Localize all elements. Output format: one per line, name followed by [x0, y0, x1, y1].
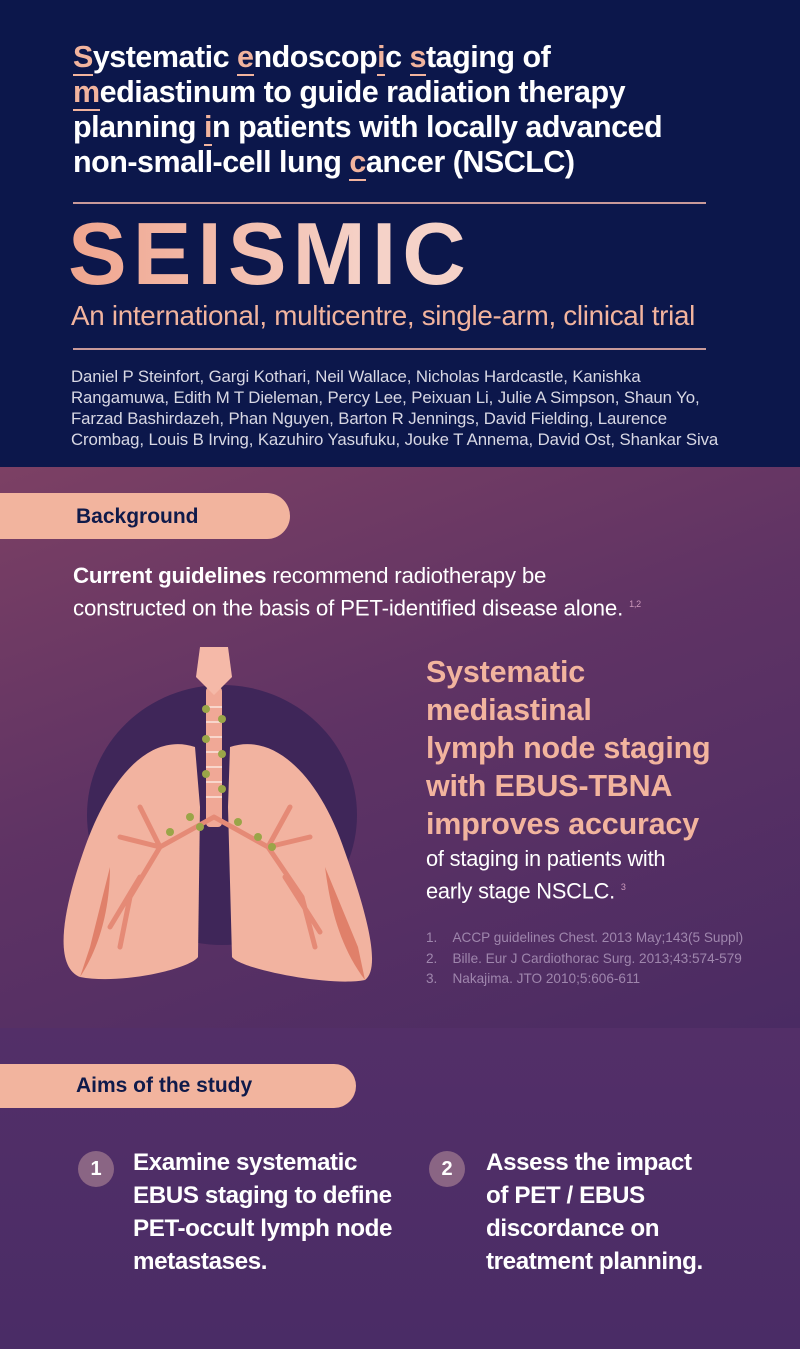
- aim 1: metastases.: [133, 1248, 267, 1275]
- title: [73, 40, 662, 181]
- title: non-small-cell lung cancer (NSCLC): [73, 145, 575, 179]
- icon: lungs illustration: [64, 647, 372, 982]
- key finding text: with EBUS-TBNA: [426, 769, 672, 803]
- panel: background: [0, 467, 800, 1028]
- aims heading pill: Aims of the study: [76, 1074, 252, 1097]
- key finding text: early stage NSCLC. 3: [426, 878, 626, 903]
- key finding text: lymph node staging: [426, 731, 710, 765]
- aim 2: 2: [441, 1158, 453, 1180]
- authors: [71, 367, 718, 449]
- title: planning in patients with locally advanced: [73, 110, 662, 144]
- references: 1. ACCP guidelines Chest. 2013 May;143(5 Suppl): [426, 930, 743, 945]
- key finding text: [426, 655, 710, 903]
- aim 1: EBUS staging to define: [133, 1182, 392, 1209]
- guideline text: constructed on the basis of PET-identified disease alone. 1,2: [73, 595, 641, 620]
- key finding text: Systematic: [426, 655, 585, 689]
- key finding text: of staging in patients with: [426, 846, 665, 871]
- aim 2: of PET / EBUS: [486, 1182, 645, 1209]
- aims heading pill: [0, 1064, 356, 1108]
- authors: Farzad Bashirdazeh, Phan Nguyen, Barton R Jennings, David Fielding, Laurence: [71, 409, 667, 428]
- acronym SEISMIC: SEISMIC: [68, 204, 472, 303]
- aim 2: Assess the impact: [486, 1149, 692, 1176]
- background heading pill: Background: [76, 505, 199, 528]
- references: [426, 930, 743, 986]
- aim 2: discordance on: [486, 1215, 659, 1242]
- aim 1: 1: [90, 1158, 102, 1180]
- title: Systematic endoscopic staging of: [73, 40, 550, 74]
- authors: Crombag, Louis B Irving, Kazuhiro Yasufuku, Jouke T Annema, David Ost, Shankar Siva: [71, 430, 718, 449]
- aim 1: [78, 1149, 392, 1275]
- header panel: [0, 0, 800, 467]
- aim 1: PET-occult lymph node: [133, 1215, 392, 1242]
- subtitle: An international, multicentre, single-arm, clinical trial: [71, 300, 695, 331]
- title: mediastinum to guide radiation therapy: [73, 75, 625, 109]
- key finding text: improves accuracy: [426, 807, 699, 841]
- references: 2. Bille. Eur J Cardiothorac Surg. 2013;43:574-579: [426, 950, 742, 966]
- key finding text: mediastinal: [426, 693, 592, 727]
- background heading pill: [0, 493, 290, 539]
- guideline text: [73, 563, 641, 620]
- aim 1: Examine systematic: [133, 1149, 357, 1176]
- aim 2: [429, 1149, 703, 1275]
- references: 3. Nakajima. JTO 2010;5:606-611: [426, 971, 640, 986]
- authors: Rangamuwa, Edith M T Dieleman, Percy Lee, Peixuan Li, Julie A Simpson, Shaun Yo,: [71, 388, 700, 407]
- authors: Daniel P Steinfort, Gargi Kothari, Neil Wallace, Nicholas Hardcastle, Kanishka: [71, 367, 641, 386]
- aim 2: treatment planning.: [486, 1248, 703, 1275]
- panel: aims: [0, 1028, 800, 1349]
- guideline text: Current guidelines recommend radiotherapy be: [73, 563, 546, 588]
